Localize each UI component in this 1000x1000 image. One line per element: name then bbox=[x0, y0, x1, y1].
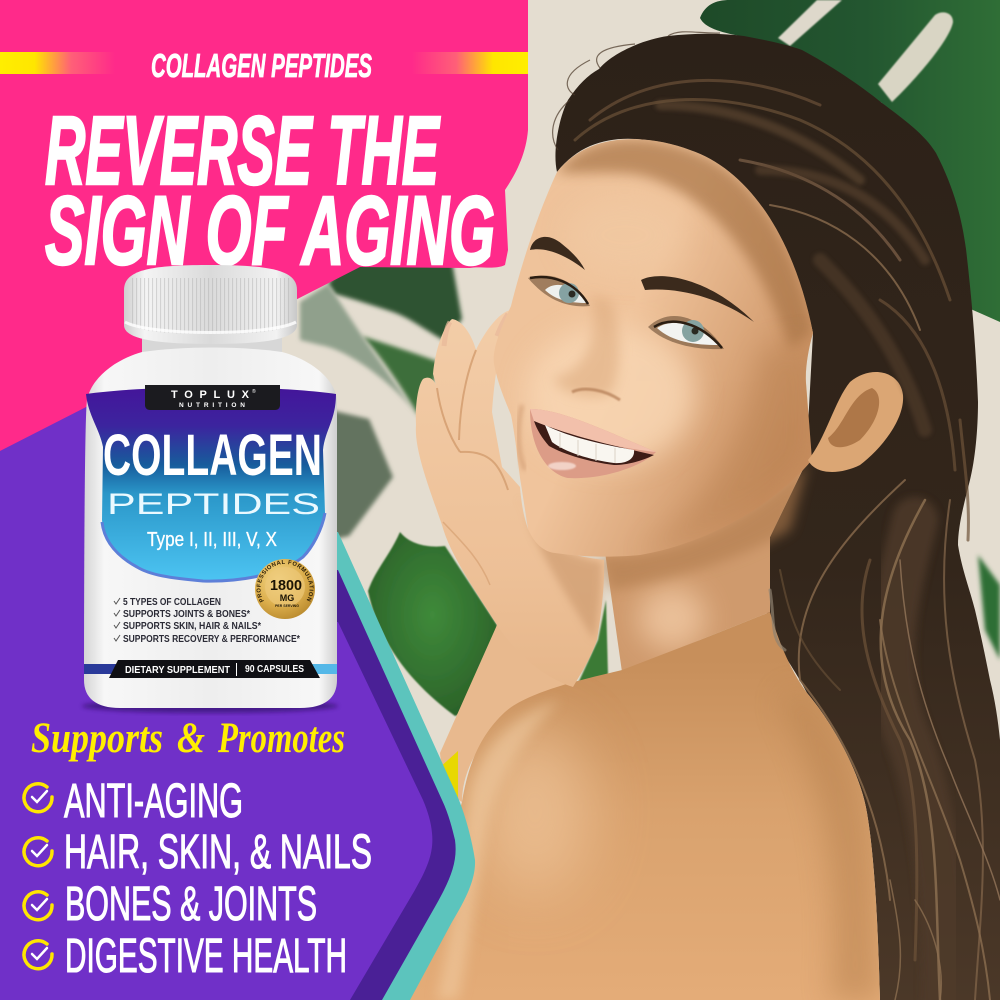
supports heading bbox=[31, 715, 345, 762]
label: lower blue rim bbox=[102, 513, 325, 581]
leaf: behind bottle, green band bbox=[362, 336, 442, 415]
supports heading: Promotes bbox=[217, 715, 345, 762]
arm bbox=[440, 600, 597, 802]
hair: back mass bbox=[555, 34, 1000, 1000]
hair: upper highlights bbox=[575, 80, 955, 470]
dark purple panel edge bbox=[330, 570, 456, 1000]
benefit lines: SUPPORTS JOINTS & BONES* bbox=[123, 609, 250, 620]
headline: SIGN OF AGING bbox=[45, 176, 495, 285]
check icon 4 bbox=[24, 941, 52, 969]
left eyebrow bbox=[530, 237, 585, 270]
face bbox=[494, 139, 813, 557]
face: forehead light bbox=[565, 195, 685, 275]
bottle neck bbox=[142, 335, 282, 360]
right eyebrow bbox=[641, 276, 754, 322]
collagen types: Type I, II, III, V, X bbox=[147, 529, 277, 551]
label: blue purple panel bbox=[86, 387, 336, 580]
yellow accent sliver bbox=[438, 751, 458, 800]
benefit 1: ANTI-AGING bbox=[64, 775, 243, 828]
brand badge: ® bbox=[252, 388, 256, 395]
leaf: lower left bbox=[368, 532, 497, 716]
bottom band: 90 CAPSULES bbox=[245, 664, 304, 675]
brand badge: TOPLUX bbox=[171, 389, 250, 401]
neck highlight bbox=[638, 586, 706, 650]
benefit 2: HAIR, SKIN, & NAILS bbox=[64, 826, 372, 879]
bottle body bbox=[84, 348, 337, 708]
benefit ticks bbox=[114, 598, 120, 641]
hair: lower strands over body bbox=[770, 420, 1000, 1000]
supports heading: & bbox=[177, 715, 205, 762]
hair: flyaway wisps bbox=[553, 32, 720, 150]
body: shadow near hair bbox=[796, 710, 880, 1000]
brand badge: NUTRITION bbox=[179, 402, 245, 409]
gold seal bbox=[255, 559, 315, 619]
hand bbox=[416, 310, 604, 687]
leaf: top right bbox=[700, 0, 1000, 322]
bottle bbox=[81, 265, 339, 716]
leaf: beside neck bbox=[574, 600, 608, 692]
gold seal: 1800 bbox=[270, 577, 302, 594]
bottle shadow bbox=[82, 699, 338, 713]
gold seal: PROFESSIONAL FORMULATION bbox=[256, 560, 314, 602]
product name: COLLAGEN bbox=[103, 423, 322, 488]
leaf: behind bottle, dark top bbox=[328, 262, 462, 341]
bottom band bbox=[84, 660, 337, 678]
headline bbox=[45, 96, 495, 285]
nostril bbox=[572, 389, 620, 400]
pink header panel bbox=[0, 0, 528, 451]
face: jaw shade bbox=[668, 348, 808, 542]
brand badge bbox=[145, 385, 280, 410]
bottom band: DIETARY SUPPLEMENT bbox=[125, 665, 230, 676]
supports heading: Supports bbox=[31, 715, 163, 762]
face: cheek glow bbox=[525, 325, 695, 465]
check icon 2 bbox=[24, 838, 52, 866]
neck shadow under chin bbox=[600, 462, 808, 590]
benefit 4: DIGESTIVE HEALTH bbox=[65, 930, 347, 983]
face: hairline shade bbox=[557, 139, 813, 350]
mouth bbox=[530, 409, 656, 478]
leaf: right edge bbox=[978, 555, 1000, 660]
teal panel edge bbox=[330, 532, 475, 1000]
benefit lines: SUPPORTS SKIN, HAIR & NAILS* bbox=[123, 621, 261, 632]
leaf: grey green shadow bbox=[330, 410, 393, 540]
benefit 3: BONES & JOINTS bbox=[65, 878, 317, 931]
purple panel bbox=[0, 392, 432, 1000]
check icon 1 bbox=[24, 784, 52, 812]
benefit lines: 5 TYPES OF COLLAGEN bbox=[123, 597, 221, 608]
body: shoulder and back bbox=[400, 612, 880, 1000]
benefit lines bbox=[123, 597, 300, 645]
benefit lines: SUPPORTS RECOVERY & PERFORMANCE* bbox=[123, 634, 300, 645]
bottle cap bbox=[124, 265, 297, 344]
face: nose shade bbox=[553, 295, 619, 397]
gradient bar left bbox=[0, 52, 115, 74]
right eye bbox=[648, 316, 724, 349]
headline: REVERSE THE bbox=[45, 96, 441, 205]
body: shoulder edge light bbox=[436, 700, 560, 1000]
body: left light bbox=[480, 725, 590, 895]
woman portrait bbox=[400, 32, 1000, 1000]
check icon 3 bbox=[24, 892, 52, 920]
neck bbox=[605, 463, 806, 672]
gradient bar right bbox=[412, 52, 528, 74]
left eye bbox=[528, 276, 590, 306]
smile line bbox=[518, 405, 525, 470]
gold seal: MG bbox=[280, 593, 294, 603]
ear bbox=[808, 372, 903, 472]
leaf: translucent sheen bbox=[300, 284, 417, 415]
product subtitle: PEPTIDES bbox=[107, 488, 320, 521]
gold seal: PER SERVING bbox=[275, 604, 299, 608]
subtitle: COLLAGEN PEPTIDES bbox=[151, 47, 372, 84]
